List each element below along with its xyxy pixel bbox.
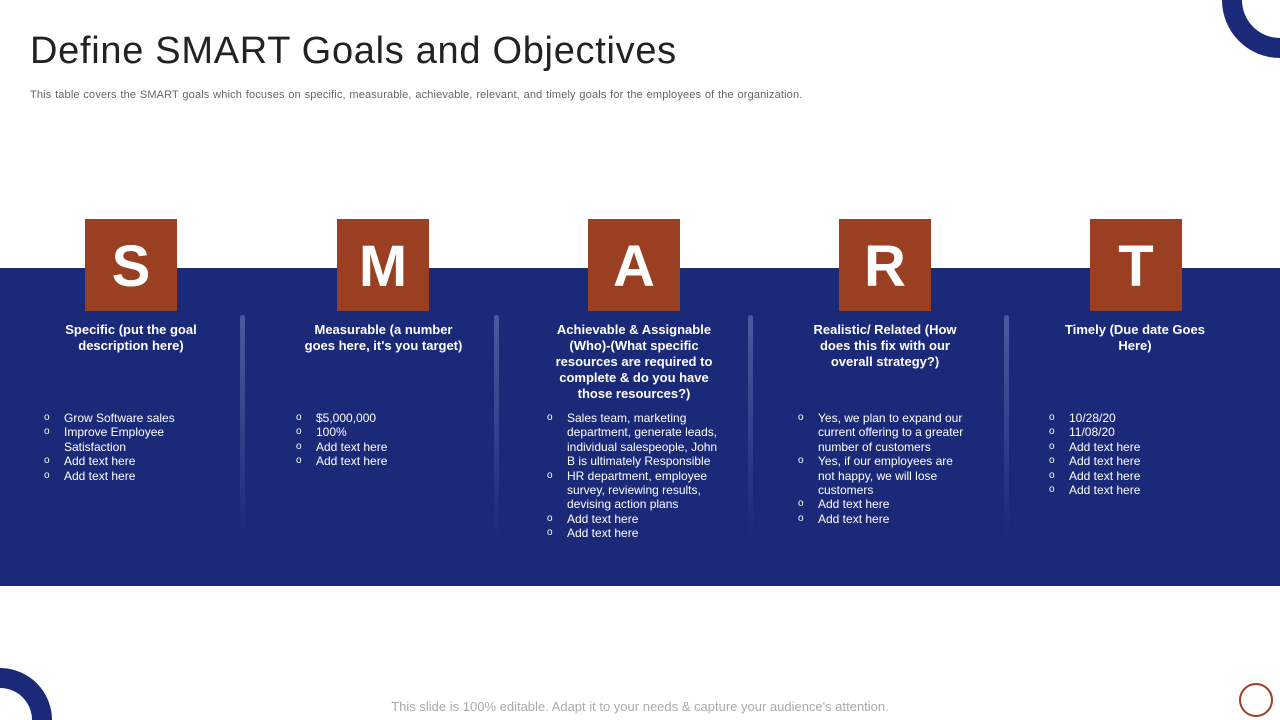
list M: Add text here [316, 440, 387, 454]
list M: $5,000,000 [316, 411, 376, 425]
heading T: Timely (Due date Goes Here) [1065, 322, 1205, 353]
list T [1049, 411, 1140, 497]
list M [296, 411, 387, 468]
column M [296, 219, 462, 468]
heading S: Specific (put the goal description here) [65, 322, 197, 353]
list T: Add text here [1069, 454, 1140, 468]
letter A: A [613, 234, 655, 299]
letter T: T [1118, 234, 1154, 299]
column R [798, 219, 964, 526]
list A [547, 411, 717, 540]
list S: Improve Employee Satisfaction [64, 425, 164, 454]
list R [798, 411, 964, 526]
column A [547, 219, 717, 540]
list M: 100% [316, 425, 347, 439]
column T [1049, 219, 1205, 497]
list A: Add text here [567, 512, 638, 526]
column S [44, 219, 197, 483]
letter S: S [112, 234, 150, 299]
list R: Add text here [818, 512, 889, 526]
subtitle: This table covers the SMART goals which focuses on specific, measurable, achievable, relevant, and timely goals for the employees of the organization. [30, 89, 802, 101]
heading A: Achievable & Assignable (Who)-(What specific resources are required to complete & do you have those resources?) [556, 322, 712, 401]
list S [44, 411, 175, 483]
list S: Grow Software sales [64, 411, 175, 425]
list S: Add text here [64, 469, 135, 483]
list T: Add text here [1069, 440, 1140, 454]
letter M [337, 219, 429, 311]
blue band panel [0, 268, 1280, 586]
letter A [588, 219, 680, 311]
list S: Add text here [64, 454, 135, 468]
list A: Sales team, marketing department, generate leads, individual salespeople, John B is ultimately Responsible [567, 411, 717, 468]
list R: Add text here [818, 497, 889, 511]
title: Define SMART Goals and Objectives [30, 30, 677, 72]
letter R [839, 219, 931, 311]
heading M: Measurable (a number goes here, it's you target) [305, 322, 462, 353]
list R: Yes, if our employees are not happy, we will lose customers [818, 454, 953, 497]
letter R: R [864, 234, 906, 299]
footer note: This slide is 100% editable. Adapt it to your needs & capture your audience's attention. [391, 699, 889, 714]
list T: Add text here [1069, 483, 1140, 497]
list R: Yes, we plan to expand our current offering to a greater number of customers [818, 411, 963, 454]
letter M: M [359, 234, 407, 299]
list M: Add text here [316, 454, 387, 468]
heading R: Realistic/ Related (How does this fix with our overall strategy?) [813, 322, 957, 369]
list T: 11/08/20 [1069, 425, 1115, 439]
list T: Add text here [1069, 469, 1140, 483]
letter T [1090, 219, 1182, 311]
list A: HR department, employee survey, reviewing results, devising action plans [567, 469, 707, 511]
list A: Add text here [567, 526, 638, 540]
list T: 10/28/20 [1069, 411, 1116, 425]
letter S [85, 219, 177, 311]
